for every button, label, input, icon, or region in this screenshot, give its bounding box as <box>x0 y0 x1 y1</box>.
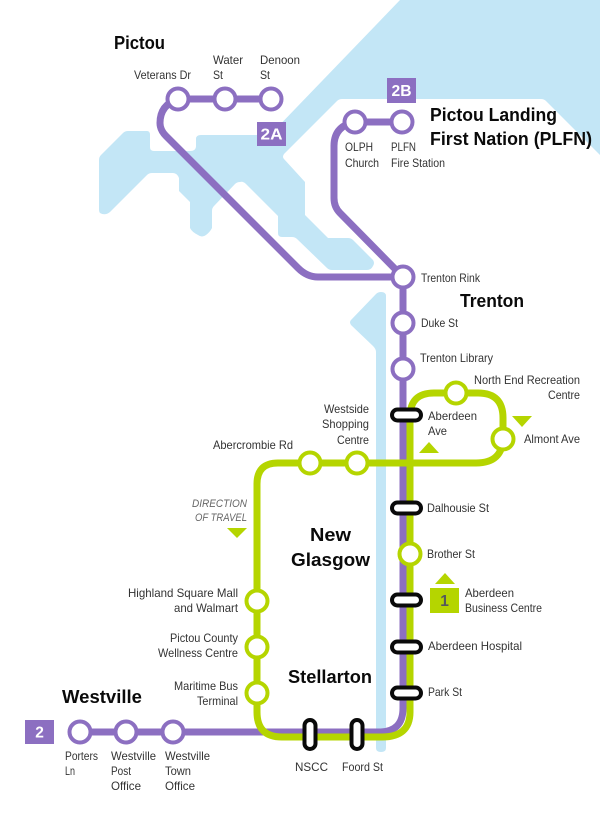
route badge 2: 2 <box>35 724 44 742</box>
station labels: Westville <box>165 749 210 763</box>
direction of travel note: OF TRAVEL <box>195 512 247 524</box>
station labels: Foord St <box>342 760 384 774</box>
station labels: Trenton Rink <box>421 271 481 285</box>
station labels: Shopping <box>322 417 369 431</box>
place names: New <box>310 524 352 545</box>
station labels: Church <box>345 156 379 170</box>
station labels: Aberdeen <box>465 586 514 600</box>
direction of travel note <box>192 498 247 524</box>
station labels: Ave <box>428 424 447 438</box>
route badge 2A: 2A <box>260 126 282 144</box>
station labels: Aberdeen Hospital <box>428 639 522 653</box>
place names: Westville <box>62 686 142 707</box>
station labels: Dalhousie St <box>427 501 490 515</box>
route badge 2 <box>25 720 54 744</box>
station labels: PLFN <box>391 140 416 154</box>
route badge 2B: 2B <box>392 83 412 100</box>
station labels: Highland Square Mall <box>128 586 238 600</box>
place names: Pictou Landing <box>430 104 557 125</box>
station labels: Town <box>165 764 191 778</box>
station labels: Business Centre <box>465 601 542 615</box>
direction arrows <box>227 416 532 584</box>
route 2 purple line <box>80 99 403 732</box>
place names: Pictou <box>114 32 165 53</box>
station labels: Wellness Centre <box>158 646 238 660</box>
route badge 2A <box>257 122 286 146</box>
station labels: Duke St <box>421 316 459 330</box>
station labels: Porters <box>65 749 98 763</box>
station labels: Post <box>111 764 132 778</box>
station labels: Veterans Dr <box>134 68 191 82</box>
station labels: Office <box>165 779 195 793</box>
station labels: Fire Station <box>391 156 445 170</box>
station labels: Office <box>111 779 141 793</box>
station labels: Water <box>213 53 243 67</box>
station labels: Almont Ave <box>524 432 580 446</box>
station labels: Brother St <box>427 547 476 561</box>
station labels: Abercrombie Rd <box>213 438 293 452</box>
station labels: Centre <box>548 388 580 402</box>
station labels: Denoon <box>260 53 300 67</box>
place names: First Nation (PLFN) <box>430 128 592 149</box>
station labels: OLPH <box>345 140 373 154</box>
place names: Trenton <box>460 290 524 311</box>
direction of travel note: DIRECTION <box>192 498 247 510</box>
water: harbour <box>99 0 600 270</box>
station labels: St <box>260 68 271 82</box>
station labels: Park St <box>428 685 463 699</box>
place names: Stellarton <box>288 666 372 687</box>
route 1 green line <box>257 393 503 737</box>
shared stops <box>304 410 421 749</box>
station labels: and Walmart <box>174 601 239 615</box>
purple stations <box>70 88 414 742</box>
station labels <box>65 53 580 793</box>
station labels: Pictou County <box>170 631 238 645</box>
station labels: St <box>213 68 224 82</box>
water: river <box>350 292 386 752</box>
station labels: Westville <box>111 749 156 763</box>
station labels: Maritime Bus <box>174 679 238 693</box>
station labels: Westside <box>324 402 369 416</box>
station labels: North End Recreation <box>474 373 580 387</box>
station labels: NSCC <box>295 760 328 774</box>
station labels: Aberdeen <box>428 409 477 423</box>
station labels: Trenton Library <box>420 351 493 365</box>
route badge 1: 1 <box>440 593 449 610</box>
route badge 2B <box>387 78 416 103</box>
station labels: Ln <box>65 764 75 778</box>
green stations <box>246 382 514 704</box>
route badge 1 <box>430 588 459 613</box>
station labels: Terminal <box>197 694 238 708</box>
place names: Glasgow <box>291 549 371 570</box>
station labels: Centre <box>337 433 369 447</box>
place names <box>62 32 592 707</box>
